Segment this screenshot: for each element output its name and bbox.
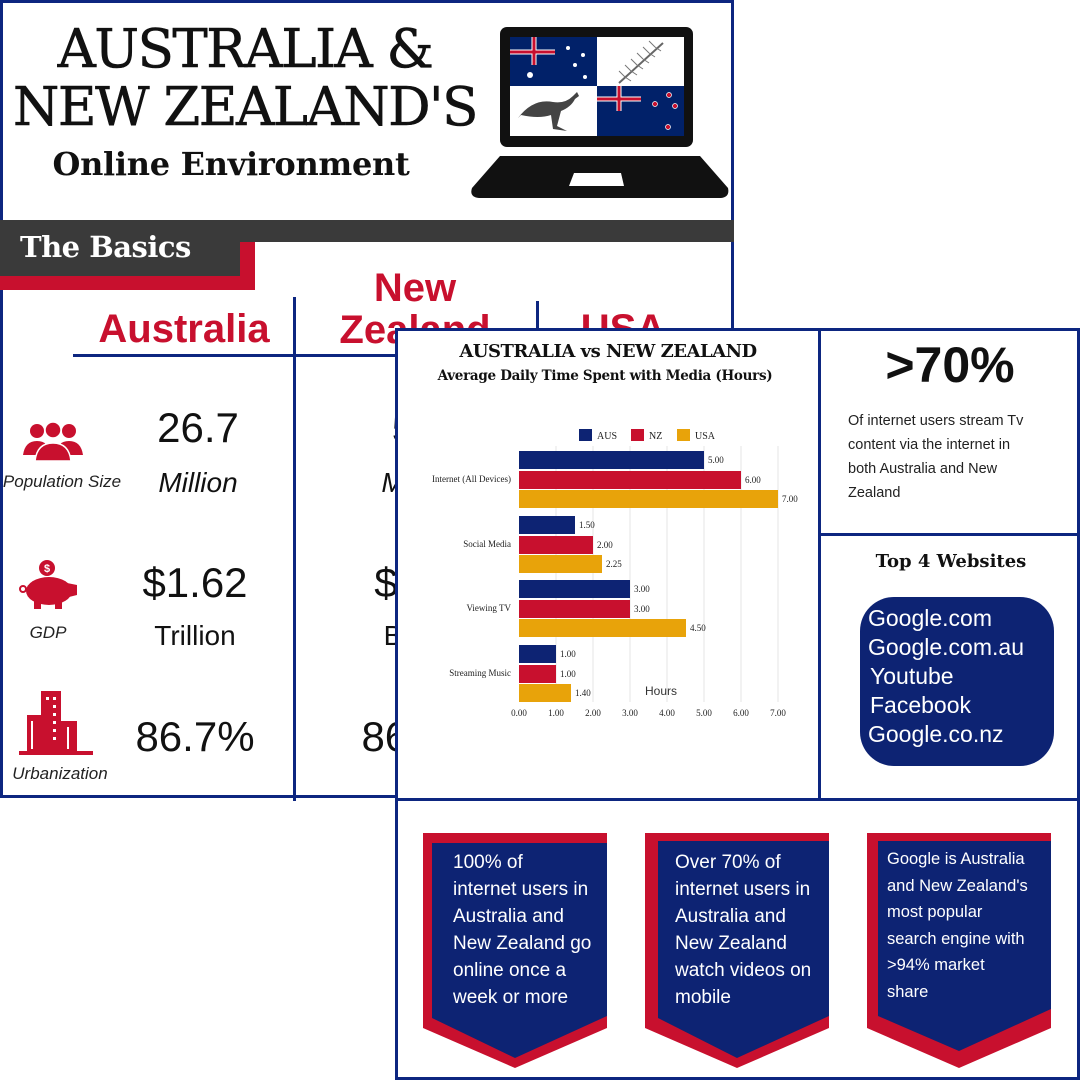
heading: top 4 websites: Top 4 Websites [876,551,1026,572]
banner: 70% mobile video: Australia and [675,906,786,927]
stat: australia population [157,404,239,498]
chart: time spent with media: 2.00 [597,540,613,550]
chart: time spent with media: 3.00 [622,708,638,718]
stat: australia population: Million [158,467,238,498]
banner: Google search share [867,833,1051,1068]
chart: time spent with media: Social Media [463,539,511,549]
stat: NZ values [381,404,461,498]
banner: 100% online weekly: 100% of [453,852,523,873]
chart: time spent with media: 2.25 [606,559,622,569]
chart: time spent with media: Viewing TV [466,603,511,613]
column header: New Zealand: New [374,266,456,310]
icon: buildings [19,691,93,755]
stat: australia urbanization: 86.7% [135,713,255,760]
chart: time spent with media: Streaming Music [449,668,511,678]
chart: time spent with media: 5.00 [696,708,712,718]
stat: australia GDP: $1.62 [142,559,248,606]
legend: USA [695,431,716,442]
subtitle: Online Environment [53,145,409,183]
chart: time spent with media: 2.00 [585,708,601,718]
banner: 100% online weekly: week or more [453,987,568,1008]
panel: left basics: $206 [374,559,468,606]
banner: 70% mobile video: mobile [675,987,731,1008]
list: websites: Youtube [870,663,954,689]
stat: NZ values: 5.1 [392,404,450,451]
stat: australia population: 26.7 [157,404,239,451]
panel: left basics: 86.5% [361,713,481,760]
chart title [437,341,772,384]
banner: Google search share: and New Zealand's [887,876,1028,894]
stat: >70% streaming: Of internet users stream Tv content via the internet in both Australia and New Zealand [848,413,1023,501]
icon: laptop with flags [471,27,728,198]
banner: Google search share: share [887,982,928,1000]
icon: piggy bank: $ [44,563,50,575]
list: websites: Facebook [870,692,971,718]
chart title: Average Daily Time Spent with Media (Hours) [437,368,772,384]
banner: 100% online weekly [423,833,607,1068]
list: websites: Google.com [868,605,992,631]
chart: time spent with media: 1.00 [548,708,564,718]
banner: Google search share: Google is Australia [887,850,1025,868]
chart: time spent with media: Hours [645,684,677,698]
chart: time spent with media: 6.00 [745,475,761,485]
banner: 70% mobile video: Over 70% of [675,852,781,873]
title: NEW ZEALAND'S [13,77,477,138]
chart: time spent with media [432,341,798,718]
bars [519,451,778,702]
title: AUSTRALIA & [58,19,432,80]
chart: time spent with media: 5.00 [708,455,724,465]
banner: Google search share: >94% market [887,956,985,974]
banner: Google search share: search engine with [887,930,1025,948]
chart: time spent with media: 0.00 [511,708,527,718]
chart: time spent with media: 3.00 [634,604,650,614]
legend [579,429,716,442]
panel: right media [395,328,1080,1080]
chart: time spent with media: 1.40 [575,688,591,698]
chart: time spent with media: 1.00 [560,649,576,659]
stat: australia GDP: Trillion [154,620,236,651]
banner: 70% mobile video: internet users in [675,879,810,900]
chart: time spent with media: 7.00 [770,708,786,718]
chart: time spent with media: 4.50 [690,623,706,633]
heading bar: The Basics [0,220,734,290]
banner: 70% mobile video: watch videos on [675,960,811,981]
column header: New Zealand [339,266,491,352]
chart title: AUSTRALIA vs NEW ZEALAND [458,341,757,362]
banner: Google search share: most popular [887,903,982,921]
legend: NZ [649,431,662,442]
panel: left basics: Billion [384,620,458,651]
column header: Australia: Australia [98,307,270,351]
stat: NZ values: Million [381,467,461,498]
icon: population [23,422,83,460]
chart: time spent with media: 4.00 [659,708,675,718]
banner: 70% mobile video: New Zealand [675,933,787,954]
label: population size: Population Size [3,472,121,491]
legend: AUS [597,431,617,442]
banner: 70% mobile video [645,833,829,1068]
banner: 100% online weekly: online once a [453,960,566,981]
icon: piggy bank [19,560,77,609]
stat: >70% streaming: >70% [885,337,1015,393]
label: urbanization: Urbanization [12,764,108,783]
chart: time spent with media: 3.00 [634,584,650,594]
label: GDP: GDP [30,623,66,642]
chart: time spent with media: 7.00 [782,494,798,504]
title [13,19,477,138]
chart: time spent with media: Internet (All Devices) [432,474,511,484]
stat: >70% streaming [848,337,1024,501]
banner: 100% online weekly: internet users in [453,879,588,900]
chart: time spent with media: 1.50 [579,520,595,530]
stat: australia GDP [142,559,248,651]
banner: 100% online weekly: Australia and [453,906,564,927]
banner: 100% online weekly: New Zealand go [453,933,591,954]
column header: New Zealand: Zealand [339,308,491,352]
chart: time spent with media: 1.00 [560,669,576,679]
heading bar: The Basics: The Basics [20,230,191,264]
list: websites: Google.co.nz [868,721,1004,747]
chart: time spent with media: 6.00 [733,708,749,718]
panel: left basics [0,0,734,798]
list: websites: Google.com.au [868,634,1024,660]
list: websites [860,597,1054,766]
column header: USA: USA [581,307,665,351]
